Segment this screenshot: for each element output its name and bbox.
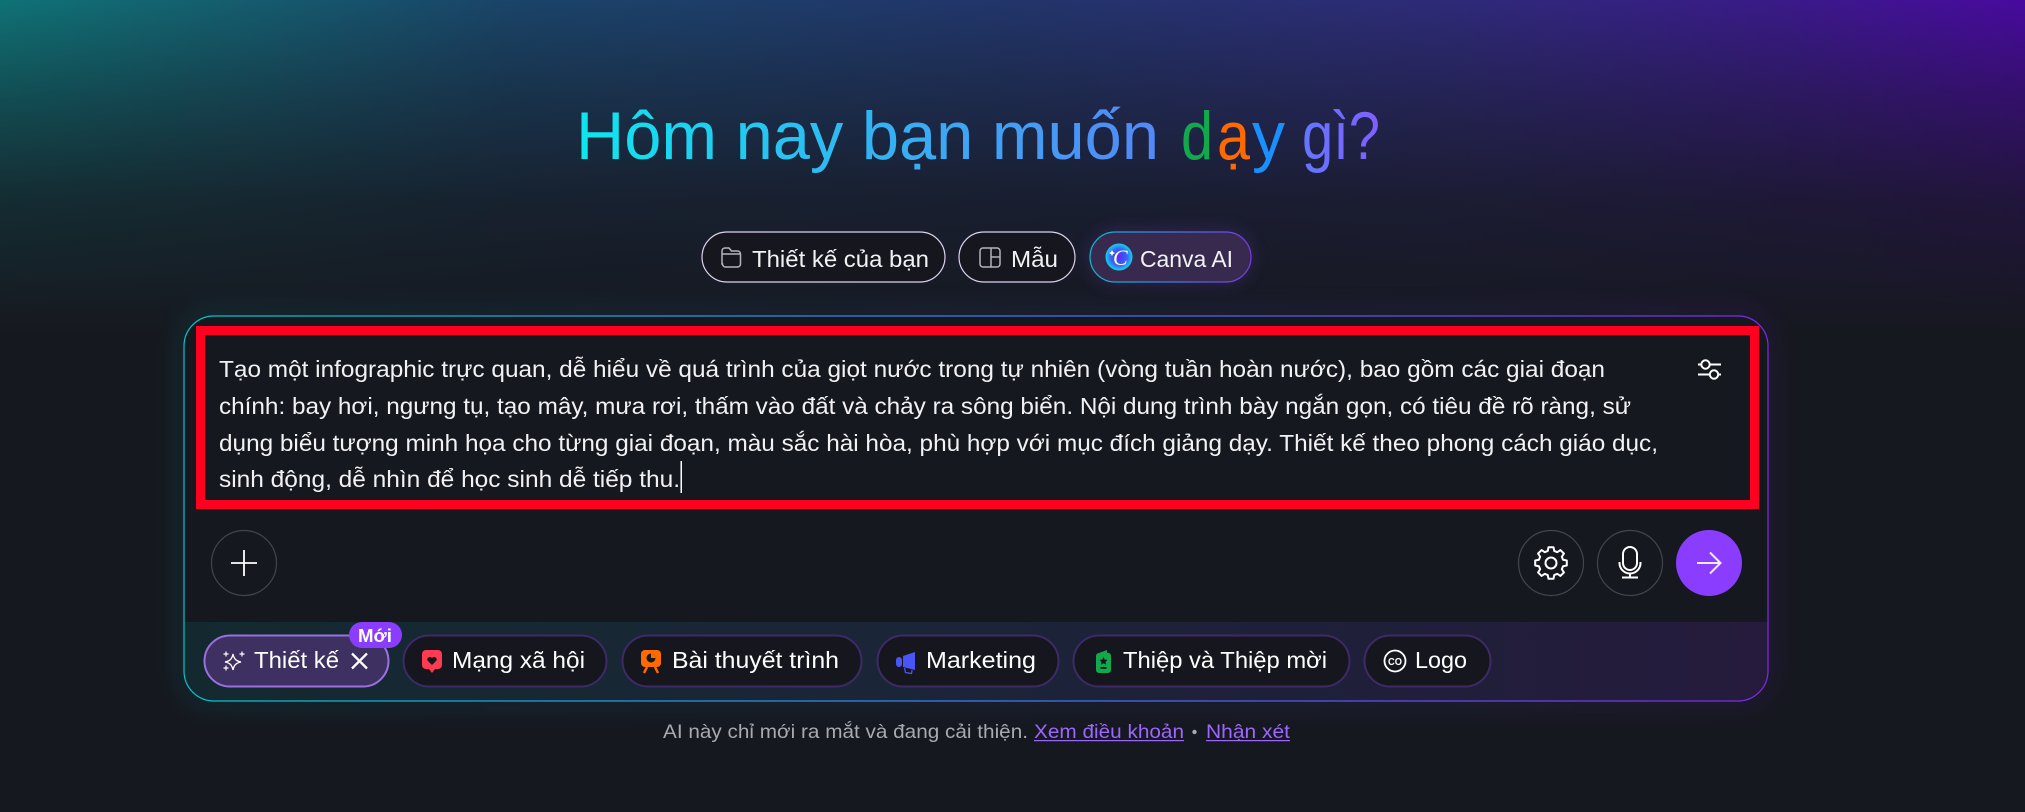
- footer note: Xem điều khoản: [1034, 721, 1184, 743]
- prompt text: Tạo một infographic trực quan, dễ hiểu về quá trình của giọt nước trong tự nhiên (vòng tuần hoàn nước), bao gồm các giai đoạn: [219, 356, 1605, 382]
- title: d: [1181, 98, 1213, 174]
- footer note: Nhận xét: [1206, 721, 1291, 743]
- footer note: [663, 720, 1291, 743]
- button: settings: [1518, 530, 1584, 596]
- icon: Canva logo: [1106, 244, 1132, 270]
- tab: Thiết kế của bạn: Thiết kế của bạn: [752, 246, 929, 272]
- icon: presentation: [641, 650, 661, 673]
- button: send arrow: [1676, 530, 1742, 596]
- icon: template: [980, 248, 1000, 267]
- icon: folder: [722, 248, 740, 267]
- badge: Mới: Mới: [358, 626, 392, 646]
- title: y: [1252, 98, 1285, 174]
- chip: Bài thuyết trình: [622, 636, 862, 686]
- button: add: [212, 530, 276, 596]
- chip: Logo: [1364, 636, 1490, 686]
- badge: Mới: [349, 622, 402, 648]
- icon: sparkles: [224, 652, 244, 670]
- tab: Mẫu: [959, 232, 1075, 282]
- tab: Canva AI: Canva AI: [1140, 246, 1233, 272]
- icon: green card: [1096, 650, 1111, 673]
- title: gì?: [1302, 98, 1380, 174]
- prompt text: dụng biểu tượng minh họa cho từng giai đoạn, màu sắc hài hòa, phù hợp với mục đích giảng dạy. Thiết kế theo phong cách giáo dục,: [219, 430, 1658, 456]
- tab: Mẫu: Mẫu: [1011, 246, 1058, 272]
- chip: Marketing: [878, 636, 1058, 686]
- chip: Thiệp và Thiệp mời: Thiệp và Thiệp mời: [1123, 647, 1327, 673]
- prompt text: sinh động, dễ nhìn để học sinh dễ tiếp thu.: [219, 466, 680, 492]
- chip: Bài thuyết trình: Bài thuyết trình: [672, 647, 839, 673]
- title: Hôm nay bạn muốn: [576, 98, 1159, 174]
- tab: Canva AI: [1090, 232, 1251, 282]
- chip: Thiết kế: [204, 636, 388, 686]
- chip: Mạng xã hội: Mạng xã hội: [452, 647, 585, 673]
- icon: close: [352, 654, 367, 668]
- icon: Canva logo: C: [1113, 245, 1128, 270]
- footer note: AI này chỉ mới ra mắt và đang cải thiện.: [663, 720, 1028, 743]
- panel: prompt card: [184, 316, 1768, 702]
- suggestion band background: [184, 622, 1768, 702]
- icon: megaphone: [896, 652, 915, 674]
- icon: social heart: [422, 650, 442, 673]
- tab: Thiết kế của bạn: [702, 232, 945, 282]
- chip: Logo: Logo: [1415, 647, 1467, 673]
- icon: logo mark: CO: [1388, 657, 1402, 668]
- red highlight box: [200, 330, 1754, 504]
- title: ạ: [1217, 98, 1250, 174]
- prompt text: [219, 356, 1658, 493]
- prompt text: chính: bay hơi, ngưng tụ, tạo mây, mưa rơi, thấm vào đất và chảy ra sông biển. Nội dung trình bày ngắn gọn, có tiêu đề rõ ràng, sử: [219, 393, 1631, 419]
- button: microphone: [1598, 530, 1662, 596]
- chip: Thiết kế: Thiết kế: [254, 647, 339, 673]
- icon: sliders: [1698, 360, 1721, 379]
- chip: Marketing: Marketing: [926, 647, 1036, 673]
- chip: Thiệp và Thiệp mời: [1074, 636, 1350, 686]
- chip: Mạng xã hội: [404, 636, 606, 686]
